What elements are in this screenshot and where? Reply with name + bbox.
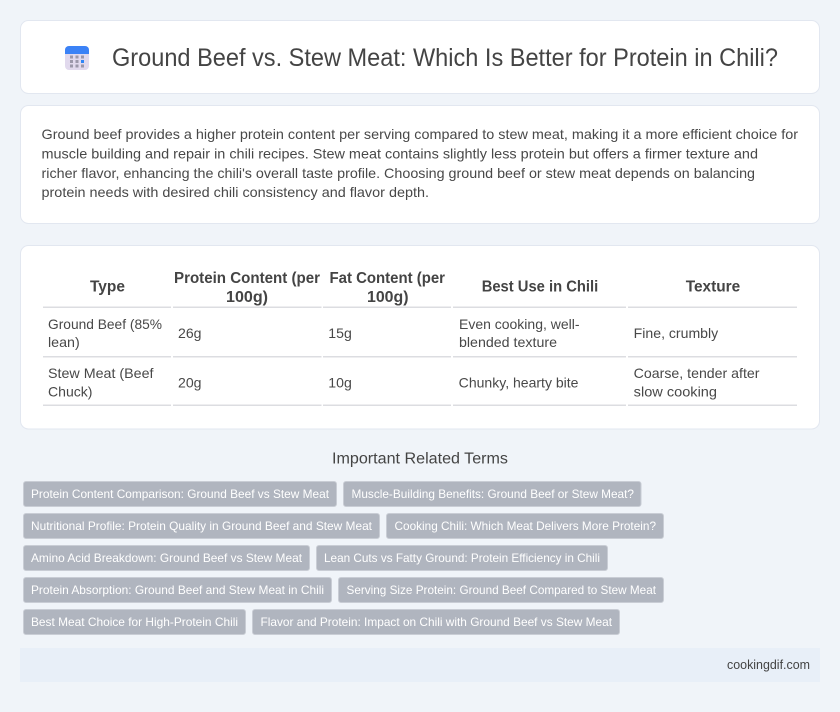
footer source text: cookingdif.com bbox=[727, 658, 810, 672]
tag: Nutritional Profile: Protein Quality in Ground Beef and Stew Meat bbox=[31, 519, 373, 533]
icon: calendar bbox=[65, 46, 89, 70]
table header row: Fat Content (per bbox=[330, 270, 445, 287]
table row: stew meat: 10g bbox=[328, 374, 352, 390]
panel: summary paragraph bbox=[20, 106, 820, 224]
table header row: Protein Content (per bbox=[174, 270, 320, 287]
tag: Flavor and Protein: Impact on Chili with Ground Beef vs Stew Meat bbox=[260, 615, 613, 629]
tag bbox=[338, 578, 664, 602]
table header row: Type bbox=[90, 278, 125, 296]
tag: Lean Cuts vs Fatty Ground: Protein Efficiency in Chili bbox=[324, 551, 600, 565]
table row: ground beef: 15g bbox=[328, 325, 352, 341]
footer bbox=[20, 648, 820, 682]
table row: ground beef: 26g bbox=[178, 325, 202, 341]
table row: stew meat: Chunky, hearty bite bbox=[459, 374, 579, 390]
table row: stew meat: slow cooking bbox=[634, 384, 717, 400]
table row: stew meat: Stew Meat (Beef bbox=[48, 365, 154, 381]
tag bbox=[24, 482, 336, 506]
tag: Cooking Chili: Which Meat Delivers More Protein? bbox=[394, 519, 656, 533]
tag bbox=[24, 514, 380, 538]
tag bbox=[316, 546, 608, 570]
panel: comparison table bbox=[20, 246, 820, 429]
table header row: Best Use in Chili bbox=[482, 278, 598, 296]
tag bbox=[252, 610, 620, 634]
tag: Best Meat Choice for High-Protein Chili bbox=[31, 615, 238, 629]
table header row: 100g) bbox=[367, 289, 408, 306]
tag: Amino Acid Breakdown: Ground Beef vs Stew Meat bbox=[31, 551, 303, 565]
table row: ground beef: lean) bbox=[48, 334, 80, 350]
tag: Muscle-Building Benefits: Ground Beef or Stew Meat? bbox=[352, 487, 634, 501]
paragraph text: Ground beef provides a higher protein content per serving compared to stew meat, making it a more efficient choice for bbox=[42, 126, 798, 142]
paragraph text: richer flavor, enhancing the chili's overall taste profile. Choosing ground beef or stew meat depends on balancing bbox=[42, 165, 755, 181]
tag: Protein Content Comparison: Ground Beef vs Stew Meat bbox=[31, 487, 330, 501]
title: Ground Beef vs. Stew Meat: Which Is Better for Protein in Chili? bbox=[112, 44, 778, 72]
heading: important related terms: Important Related Terms bbox=[332, 450, 508, 468]
related terms tags bbox=[24, 482, 664, 634]
tag bbox=[386, 514, 664, 538]
tag bbox=[24, 578, 332, 602]
paragraph text: muscle building and repair in chili recipes. Stew meat contains slightly less protein but offers a firmer texture and bbox=[42, 146, 758, 162]
table row: ground beef bbox=[43, 316, 797, 358]
table header row bbox=[43, 270, 797, 308]
table row: stew meat: 20g bbox=[178, 374, 202, 390]
table row: stew meat: Chuck) bbox=[48, 384, 92, 400]
table row: ground beef: Ground Beef (85% bbox=[48, 316, 162, 332]
table row: stew meat: Coarse, tender after bbox=[634, 365, 760, 381]
tag bbox=[24, 610, 246, 634]
tag: Serving Size Protein: Ground Beef Compared to Stew Meat bbox=[346, 583, 657, 597]
table row: stew meat bbox=[43, 365, 797, 406]
tag bbox=[344, 482, 641, 506]
table header row: Texture bbox=[686, 278, 741, 296]
paragraph text bbox=[42, 126, 798, 200]
tag: Protein Absorption: Ground Beef and Stew Meat in Chili bbox=[31, 583, 324, 597]
paragraph text: protein needs with desired chili consistency and flavor depth. bbox=[42, 184, 429, 200]
header card bbox=[20, 20, 820, 94]
table row: ground beef: Fine, crumbly bbox=[634, 325, 718, 341]
table row: ground beef: blended texture bbox=[459, 334, 557, 350]
tag bbox=[24, 546, 310, 570]
table header row: 100g) bbox=[226, 289, 268, 306]
table row: ground beef: Even cooking, well- bbox=[459, 316, 580, 332]
